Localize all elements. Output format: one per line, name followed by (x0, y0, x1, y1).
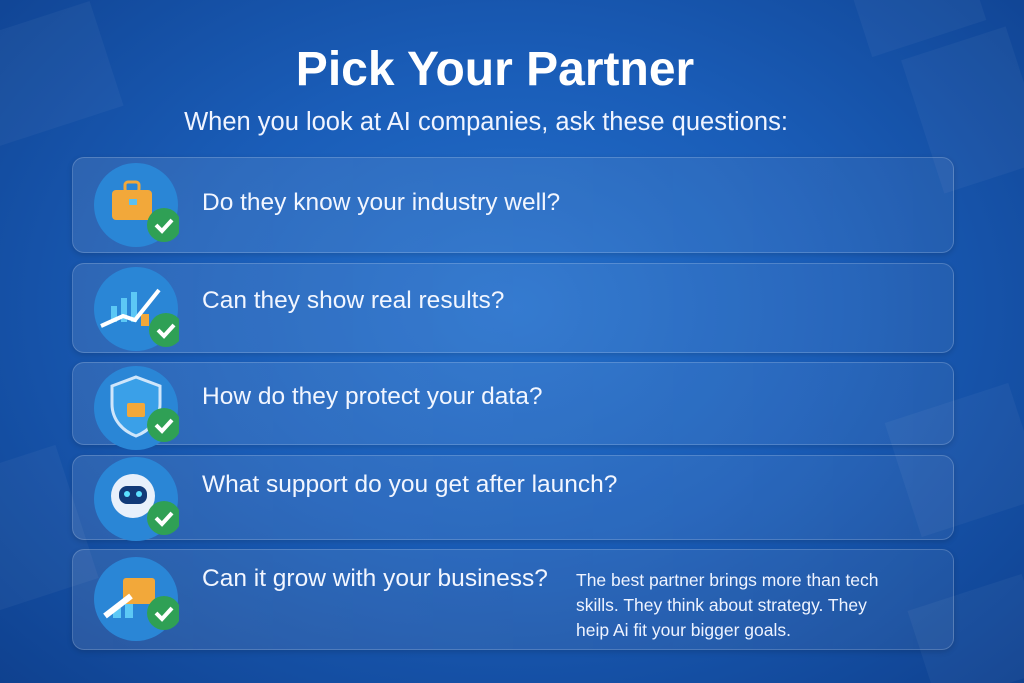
panel: industry: Do they know your industry well? (202, 189, 560, 216)
subtitle: When you look at AI companies, ask these questions: (184, 108, 788, 136)
panel: growth (72, 549, 954, 650)
panel: support (72, 455, 954, 540)
icon: briefcase (94, 163, 179, 247)
panel: results (72, 263, 954, 353)
icon: chart (94, 267, 179, 351)
panel: support: What support do you get after launch? (202, 471, 617, 498)
text: closing note: The best partner brings more than tech skills. They think about strategy. They heip Ai fit your bigger goals. (576, 570, 879, 640)
icon: shield (94, 366, 179, 450)
panel: data (72, 362, 954, 445)
panel: data: How do they protect your data? (202, 383, 542, 410)
panel: industry (72, 157, 954, 253)
icon: growth briefcase (94, 557, 179, 641)
panel: results: Can they show real results? (202, 287, 504, 314)
icon: robot (94, 457, 179, 541)
title: Pick Your Partner (296, 43, 694, 96)
panel: growth: Can it grow with your business? (202, 565, 548, 592)
